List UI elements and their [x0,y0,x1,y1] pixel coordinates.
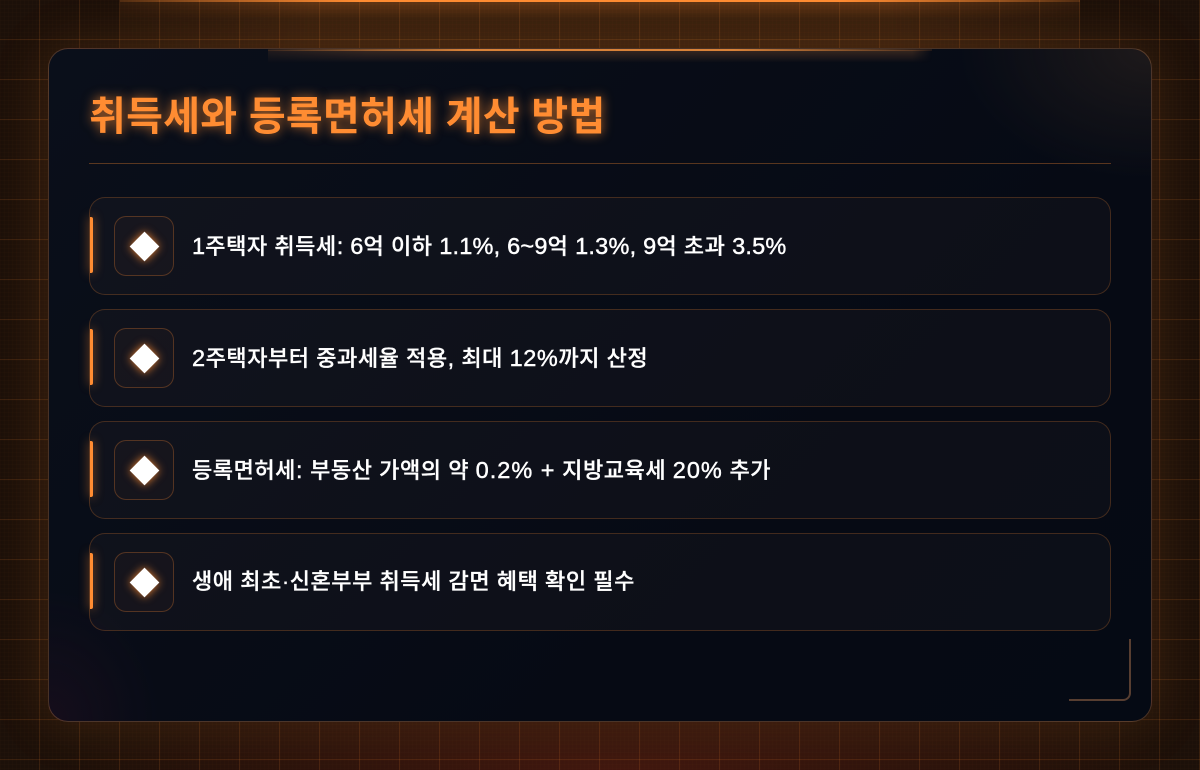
top glow bar [120,0,1080,2]
card top accent bar [268,49,932,51]
item text 1: 1주택자 취득세: 6억 이하 1.1%, 6~9억 1.3%, 9억 초과 3.5% [192,233,787,259]
accent bar 1 [90,217,93,273]
list item 4 [89,533,1111,631]
accent bar 3 [90,441,93,497]
icon: diamond 1 [114,216,174,276]
item text 2: 2주택자부터 중과세율 적용, 최대 12%까지 산정 [192,345,648,371]
card top glow [268,50,928,60]
icon: diamond 4 [114,552,174,612]
corner bracket decoration [1069,639,1131,701]
item text 4: 생애 최초·신혼부부 취득세 감면 혜택 확인 필수 [192,569,635,594]
top glow band [120,0,1080,48]
icon: diamond 2 [114,328,174,388]
accent bar 2 [90,329,93,385]
title: 취득세와 등록면허세 계산 방법 [89,95,606,139]
item text 3: 등록면허세: 부동산 가액의 약 0.2% + 지방교육세 20% 추가 [192,457,771,483]
list item 1 [89,197,1111,295]
list item 3 [89,421,1111,519]
list item 2 [89,309,1111,407]
accent bar 4 [90,553,93,609]
icon: diamond 3 [114,440,174,500]
title divider [89,163,1111,164]
